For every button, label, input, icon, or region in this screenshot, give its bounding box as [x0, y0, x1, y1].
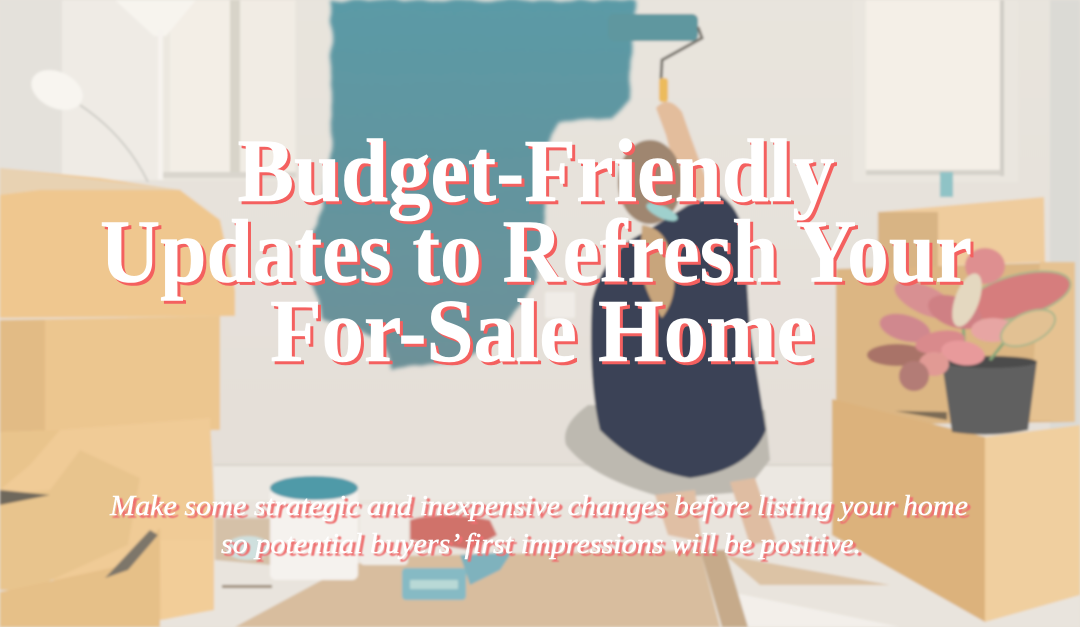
subtitle line 1: Make some strategic and inexpensive changes before listing your home — [112, 492, 971, 524]
pot — [942, 361, 1037, 435]
torso — [591, 195, 766, 478]
stems — [962, 300, 1010, 360]
head hair — [618, 140, 682, 224]
wall outlet — [545, 292, 575, 318]
protective cardboard on floor — [235, 550, 720, 627]
leaves — [960, 262, 1076, 330]
paint bucket and supplies — [222, 476, 512, 600]
subtitle line 2: so potential buyers’ first impressions will be positive. — [221, 528, 861, 560]
paint wall patch — [305, 0, 634, 370]
title line 3: For-Sale Home — [273, 285, 817, 384]
woman painting — [565, 102, 776, 545]
title line 1: Budget-Friendly — [240, 125, 838, 224]
title line 3: For-Sale Home — [270, 282, 814, 381]
title line 2: Updates to Refresh Your — [100, 202, 972, 302]
right window — [853, 0, 1018, 197]
floor lamp — [25, 0, 196, 182]
paint roller — [608, 14, 702, 102]
subtitle line 1: Make some strategic and inexpensive changes before listing your home — [109, 490, 968, 522]
potted plant — [867, 248, 1076, 435]
scrunchie — [644, 199, 680, 225]
ponytail — [640, 225, 674, 318]
left door and window — [62, 0, 296, 180]
pants and legs — [565, 405, 770, 498]
right stack of boxes — [832, 197, 1080, 622]
title line 2: Updates to Refresh Your — [103, 206, 975, 304]
title — [100, 122, 975, 384]
floor — [150, 500, 1080, 627]
feet — [655, 490, 702, 542]
arm — [656, 102, 712, 205]
baseboard — [214, 465, 834, 501]
title line 1: Budget-Friendly — [238, 122, 834, 221]
left stack of boxes — [0, 168, 235, 627]
subtitle line 2: so potential buyers’ first impressions will be positive. — [224, 530, 864, 562]
subtitle — [109, 490, 971, 562]
